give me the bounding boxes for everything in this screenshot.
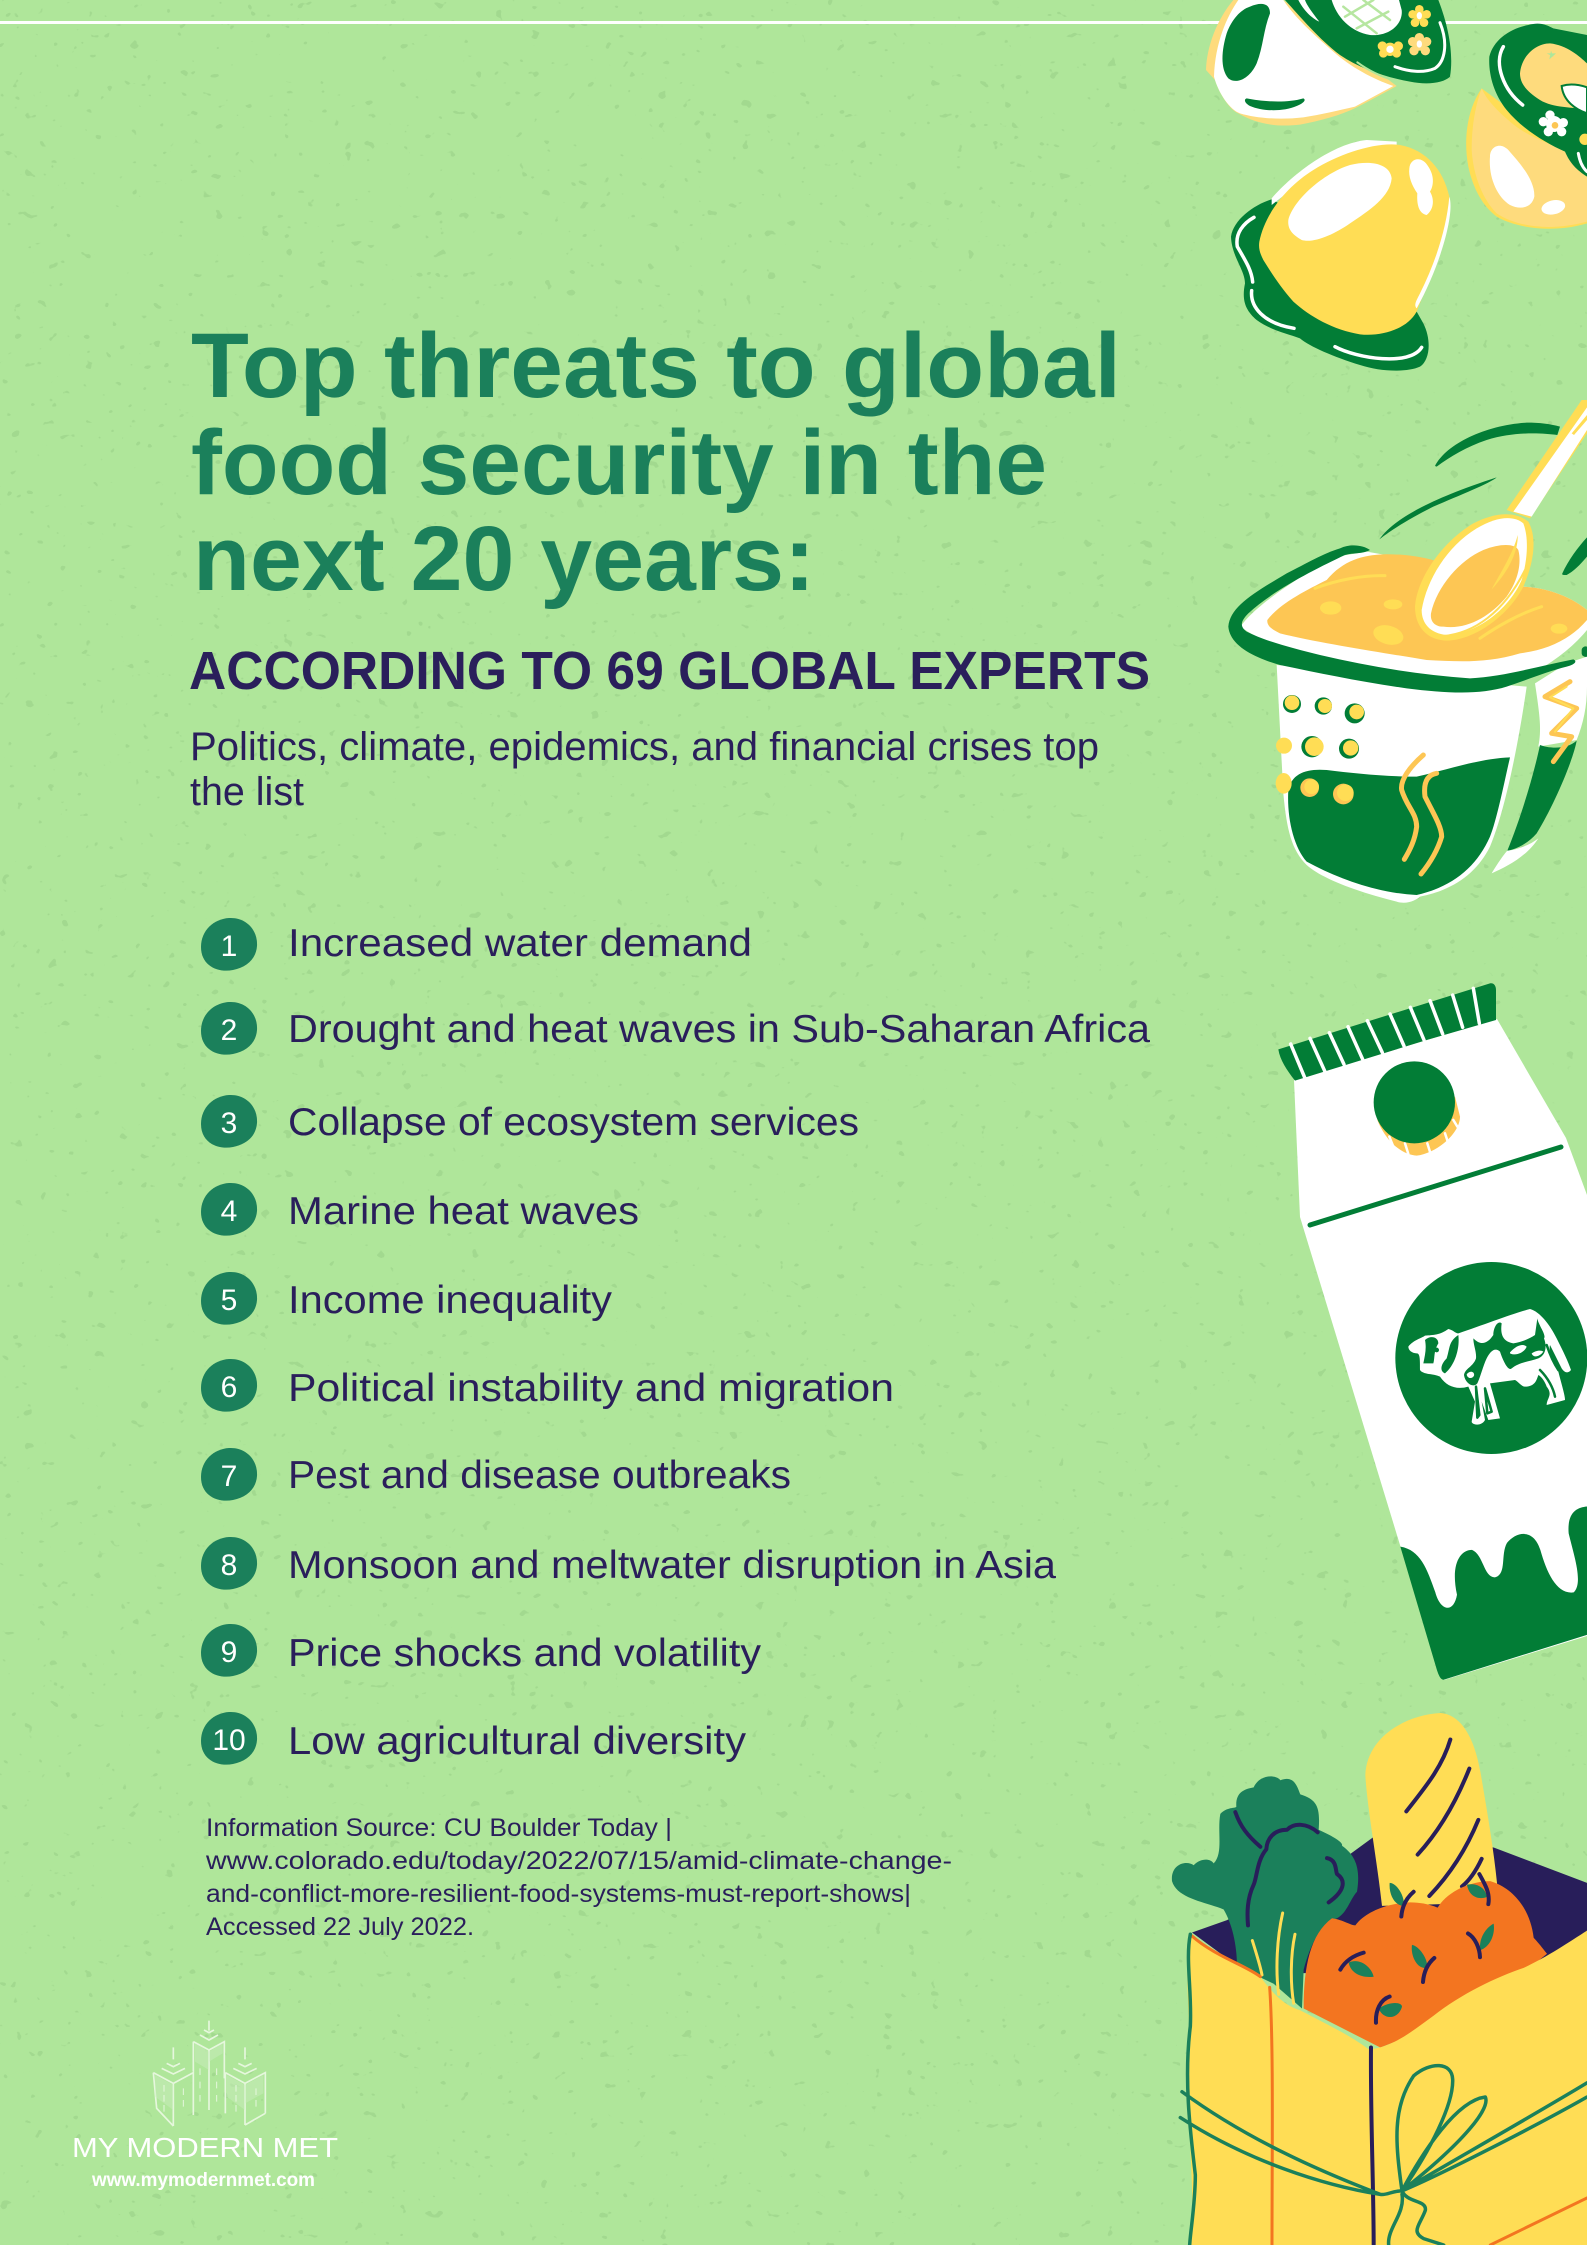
illustration: yellow pudding pot bbox=[1231, 140, 1451, 371]
logo: My Modern Met: MY MODERN MET bbox=[72, 2132, 338, 2163]
list item 8 bbox=[201, 1537, 1056, 1590]
title: Top threats to global bbox=[191, 315, 1121, 417]
list item 3: 3 bbox=[221, 1107, 237, 1140]
title: next 20 years: bbox=[193, 508, 815, 610]
information source: www.colorado.edu/today/2022/07/15/amid-climate-change- bbox=[205, 1847, 952, 1875]
list item 10: 10 bbox=[212, 1724, 246, 1757]
information source: Accessed 22 July 2022. bbox=[206, 1913, 474, 1941]
list item 8: Monsoon and meltwater disruption in Asia bbox=[288, 1544, 1056, 1587]
title: food security in the bbox=[191, 412, 1047, 514]
spoon bbox=[1415, 400, 1587, 641]
list item 1 bbox=[201, 918, 752, 971]
list item 5: Income inequality bbox=[288, 1279, 613, 1322]
information source bbox=[205, 1814, 952, 1941]
intro text: the list bbox=[190, 770, 304, 814]
list item 2: 2 bbox=[221, 1014, 237, 1047]
list item 3: Collapse of ecosystem services bbox=[288, 1101, 859, 1144]
lettuce bbox=[1172, 1776, 1358, 2009]
intro text bbox=[190, 725, 1099, 814]
illustration: grocery bag bbox=[1172, 1713, 1587, 2245]
list item 9: 9 bbox=[221, 1636, 237, 1669]
list item 4 bbox=[201, 1183, 639, 1236]
list item 9 bbox=[201, 1624, 762, 1677]
illustration: yogurt cup with spoon bbox=[1228, 400, 1587, 903]
dots bbox=[1276, 695, 1365, 804]
list item 7: Pest and disease outbreaks bbox=[288, 1454, 791, 1497]
list item 1: 1 bbox=[221, 930, 237, 963]
intro text: Politics, climate, epidemics, and financial crises top bbox=[190, 725, 1099, 769]
list item 8: 8 bbox=[221, 1549, 237, 1582]
list item 9: Price shocks and volatility bbox=[288, 1632, 762, 1675]
list item 6: 6 bbox=[221, 1371, 237, 1404]
list item 1: Increased water demand bbox=[288, 922, 752, 965]
list item 3 bbox=[201, 1095, 859, 1148]
information source: Information Source: CU Boulder Today | bbox=[206, 1814, 672, 1842]
cow badge bbox=[1395, 1262, 1587, 1454]
list item 2 bbox=[201, 1002, 1150, 1055]
subheading: ACCORDING TO 69 GLOBAL EXPERTS bbox=[189, 641, 1150, 701]
baguette bbox=[1365, 1713, 1497, 1906]
carton drip band bbox=[1400, 1507, 1587, 1680]
oranges bbox=[1304, 1874, 1547, 2047]
cup lid bbox=[1285, 0, 1451, 83]
logo: My Modern Met bbox=[72, 2021, 338, 2191]
title bbox=[191, 315, 1121, 610]
illustration: tilted lidded cup, top bbox=[1206, 0, 1451, 126]
illustration: milk carton bbox=[1278, 983, 1587, 1680]
steam lines bbox=[1401, 755, 1442, 874]
logo: My Modern Met: www.mymodernmet.com bbox=[91, 2170, 315, 2191]
list item 5 bbox=[201, 1272, 613, 1325]
list item 4: Marine heat waves bbox=[288, 1190, 639, 1233]
list item 10 bbox=[201, 1712, 747, 1765]
string and bow bbox=[1180, 1934, 1587, 2245]
list item 2: Drought and heat waves in Sub-Saharan Africa bbox=[288, 1008, 1150, 1051]
information source: and-conflict-more-resilient-food-systems-must-report-shows| bbox=[206, 1880, 911, 1908]
list item 7 bbox=[201, 1448, 791, 1501]
carton cap bbox=[1374, 1061, 1460, 1156]
carton crimp bbox=[1278, 983, 1496, 1081]
list item 6: Political instability and migration bbox=[288, 1367, 894, 1410]
bag front bbox=[1187, 1931, 1587, 2245]
ranked threat list bbox=[201, 918, 1150, 1765]
list item 4: 4 bbox=[221, 1195, 237, 1228]
illustration: tilted lidded cup, right bbox=[1466, 24, 1587, 229]
list item 5: 5 bbox=[221, 1284, 237, 1317]
list item 7: 7 bbox=[221, 1460, 237, 1493]
icon: city towers bbox=[153, 2021, 265, 2126]
list item 10: Low agricultural diversity bbox=[288, 1720, 747, 1763]
list item 6 bbox=[201, 1359, 894, 1412]
motion lines bbox=[1379, 423, 1587, 575]
